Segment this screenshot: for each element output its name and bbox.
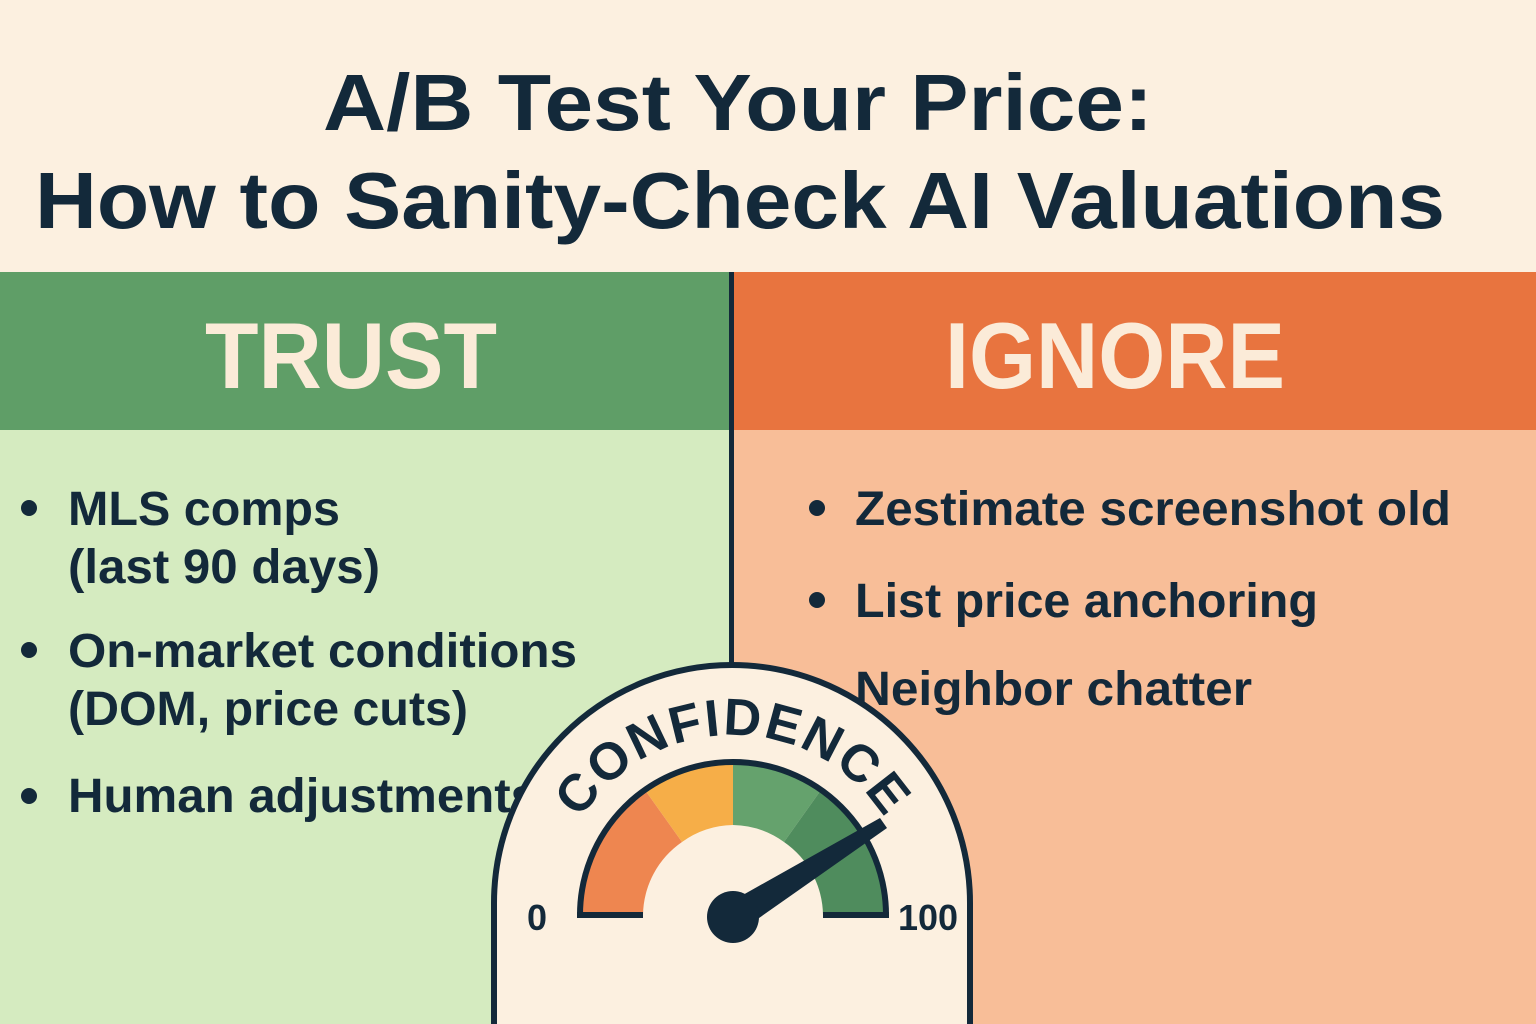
text block: trust list: Human adjustments — [68, 770, 538, 823]
title: A/B Test Your Price: — [323, 58, 1153, 147]
gauge arc — [577, 762, 889, 915]
gauge: confidence — [491, 662, 973, 1024]
heading: trust: TRUST — [205, 303, 497, 408]
heading: ignore: IGNORE — [945, 303, 1285, 408]
gauge: confidence: 100 — [898, 897, 958, 938]
panel: ignore — [734, 272, 1536, 1024]
title: How to Sanity-Check AI Valuations — [35, 156, 1445, 245]
text block: ignore list: Neighbor chatter — [855, 663, 1252, 716]
text block: ignore list: List price anchoring — [855, 575, 1318, 628]
text block: ignore list: Zestimate screenshot old — [855, 483, 1451, 536]
panel: trust — [0, 272, 731, 1024]
labels: scale: 0 — [527, 897, 547, 938]
text block: trust list: MLS comps — [68, 483, 340, 536]
text block: ignore list — [809, 483, 1451, 716]
text block: trust list: (last 90 days) — [68, 541, 380, 594]
text block: trust list — [21, 483, 577, 823]
title — [35, 58, 1445, 245]
text block: trust list: On-market conditions — [68, 625, 577, 678]
label: confidence: CONFIDENCE — [558, 698, 912, 816]
text block: trust list: (DOM, price cuts) — [68, 683, 468, 736]
needle — [707, 818, 887, 943]
